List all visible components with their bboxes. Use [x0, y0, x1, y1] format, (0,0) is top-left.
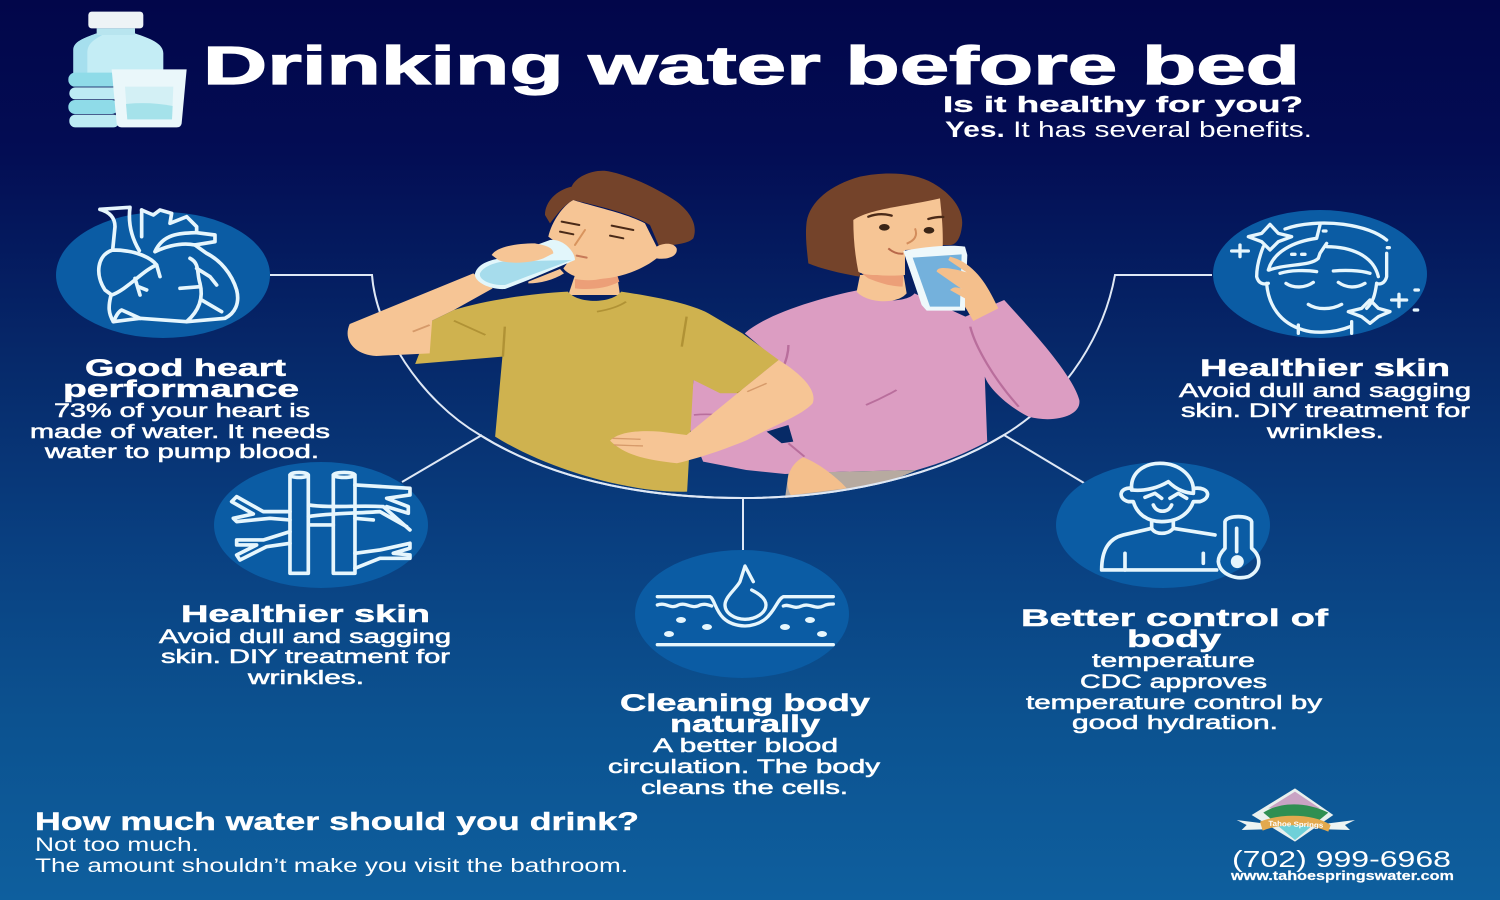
body text	[608, 736, 881, 799]
heading: Cleaning body	[620, 690, 871, 717]
woman's head	[806, 173, 998, 321]
panel: how much water	[35, 808, 639, 877]
heading: Good heart	[85, 355, 286, 382]
heading: How much water should you drink?	[35, 808, 639, 836]
subtitle: Yes. It has several benefits.	[945, 117, 1312, 142]
body text: made of water. It needs	[30, 422, 330, 443]
subtitle: Is it healthy for you?	[943, 92, 1303, 117]
illustration: woman drinking	[689, 173, 1079, 498]
logo: Tahoe Springs	[1237, 788, 1355, 842]
heading: performance	[63, 376, 299, 403]
panel: better control of body	[1021, 462, 1330, 734]
body text: CDC approves	[1080, 672, 1267, 693]
body text: The amount shouldn’t make you visit the bathroom.	[35, 856, 628, 877]
connector lines	[270, 275, 1212, 550]
icon: skin and water drop	[635, 550, 849, 678]
body text: temperature control by	[1026, 693, 1323, 714]
body text: cleans the cells.	[641, 778, 848, 799]
heading: Healthier skin	[1200, 355, 1450, 382]
contact website: www.tahoespringswater.com	[1230, 868, 1454, 883]
body text: water to pump blood.	[43, 442, 319, 463]
subtitle	[943, 92, 1312, 142]
heading: body	[1127, 626, 1222, 653]
body text: A better blood	[653, 736, 838, 757]
body text	[35, 835, 628, 877]
icon: glowing face	[1213, 210, 1427, 338]
man's head	[475, 171, 695, 289]
man's neck	[568, 272, 620, 295]
icon: heart	[56, 207, 270, 338]
body text: 73% of your heart is	[54, 401, 310, 422]
heading: Better control of	[1021, 605, 1330, 632]
icon: person with thermometer	[1056, 462, 1270, 588]
panel: cleaning body naturally	[608, 550, 881, 799]
body text: Avoid dull and sagging	[1179, 381, 1471, 402]
body text: circulation. The body	[608, 757, 881, 778]
body text	[30, 401, 330, 463]
icon: water bottle and glass	[68, 12, 187, 127]
heading	[620, 690, 871, 738]
body text	[159, 627, 451, 689]
body text: skin. DIY treatment for	[1181, 401, 1471, 422]
body text: wrinkles.	[246, 668, 364, 689]
body text	[1026, 651, 1323, 734]
panel: good heart performance	[30, 207, 330, 463]
panel: healthier skin right	[1179, 210, 1471, 443]
body text: temperature	[1092, 651, 1255, 672]
body text: Not too much.	[35, 835, 199, 856]
title: Drinking water before bed	[203, 36, 1300, 96]
man's body	[348, 273, 814, 492]
body text: good hydration.	[1072, 713, 1278, 734]
logo: Tahoe Springs: Tahoe Springs	[1268, 819, 1323, 830]
heading	[63, 355, 299, 403]
heading: naturally	[670, 711, 821, 738]
contact phone: (702) 999-6968	[1232, 846, 1451, 872]
illustration: man drinking	[348, 171, 814, 492]
icon: blood vessels	[214, 462, 428, 588]
woman's body	[689, 290, 1079, 498]
body text: Avoid dull and sagging	[159, 627, 451, 648]
body text: wrinkles.	[1265, 422, 1384, 443]
panel: healthier skin left	[159, 462, 451, 689]
body text: skin. DIY treatment for	[161, 647, 451, 668]
heading	[1021, 605, 1330, 653]
arc overlay	[480, 435, 1004, 498]
heading: Healthier skin	[181, 601, 430, 628]
body text	[1179, 381, 1471, 443]
